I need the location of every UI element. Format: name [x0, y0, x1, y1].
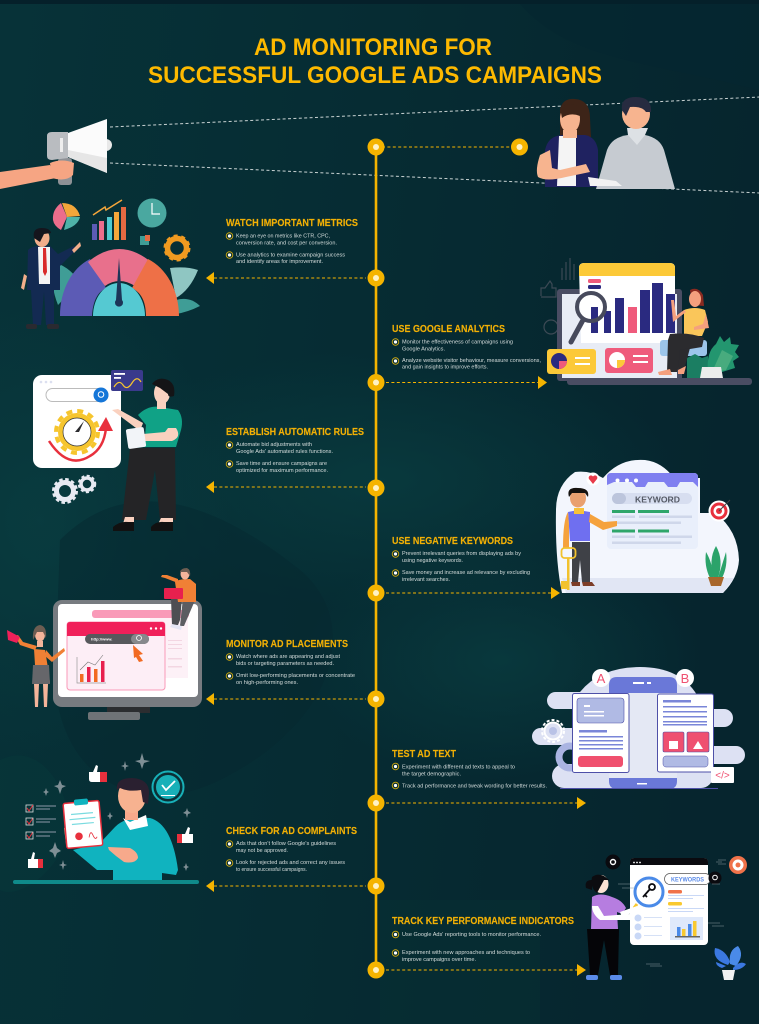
- variant A card: [572, 694, 629, 772]
- bullet points: [226, 233, 345, 265]
- bullet points: [392, 763, 547, 790]
- bullet points: [226, 654, 355, 686]
- panel: track key performance indicators: [392, 916, 574, 963]
- target badge: [729, 856, 747, 874]
- bullet points: [392, 339, 542, 371]
- illustration: automatic rules: [33, 370, 182, 531]
- panel: check for ad complaints: [226, 826, 357, 873]
- timeline nodes: [368, 138, 384, 978]
- bullet points: irrelevant searches.: [402, 577, 450, 583]
- bullet points: [392, 931, 541, 963]
- bullet points: Automate bid adjustments with: [236, 442, 312, 448]
- magnifier: [571, 293, 605, 342]
- ghost content lines: [168, 640, 182, 668]
- heading: TEST AD TEXT: [392, 749, 456, 760]
- badge A: [592, 669, 610, 687]
- businessman: [21, 228, 81, 329]
- icon: megaphone held in hand: [0, 119, 112, 189]
- bullet points: and gain insights to improve efforts.: [402, 365, 488, 371]
- gears: [542, 720, 581, 768]
- title: [148, 34, 602, 89]
- man on monitor with laptop: [161, 568, 196, 630]
- bullet points: Use analytics to examine campaign success: [236, 252, 345, 258]
- heading: WATCH IMPORTANT METRICS: [226, 218, 358, 229]
- panel: watch important metrics: [226, 218, 358, 265]
- bullet points: bids or targeting parameters as needed.: [236, 661, 334, 667]
- arrow: complaints: [206, 880, 366, 892]
- variant B card: [658, 694, 714, 772]
- keywords search pill: KEYWORDS: [671, 878, 704, 884]
- phone: [609, 677, 677, 789]
- man with key: [561, 488, 617, 590]
- illustration: ad placements monitor: [7, 568, 202, 720]
- blue plant: [715, 946, 746, 980]
- sparkles: [43, 753, 191, 871]
- man with clipboard: [64, 778, 178, 880]
- motion marks: [618, 860, 726, 966]
- thumbs up: [28, 765, 193, 868]
- bullet points: using negative keywords.: [402, 558, 463, 564]
- bullet points: [226, 841, 345, 873]
- timeline spine: [375, 147, 377, 970]
- heading: USE NEGATIVE KEYWORDS: [392, 536, 513, 547]
- heading: USE GOOGLE ANALYTICS: [392, 324, 505, 335]
- line and bar chart: [77, 655, 106, 683]
- navy note: [111, 370, 143, 391]
- panel: monitor ad placements: [226, 639, 355, 686]
- bullet points: [226, 442, 333, 474]
- signal lines from megaphone: [110, 97, 759, 193]
- heading: MONITOR AD PLACEMENTS: [226, 639, 348, 650]
- woman with megaphone: [7, 625, 65, 707]
- bullet points: Experiment with different ad texts to appeal to: [402, 765, 515, 771]
- bar chart icon: [92, 200, 126, 240]
- illustration: ad complaints: [13, 753, 199, 884]
- bullet points: optimized for maximum performance.: [236, 468, 328, 474]
- bullet points: improve campaigns over time.: [402, 957, 476, 963]
- title: AD MONITORING FOR: [254, 34, 492, 61]
- clipboard: [63, 797, 103, 848]
- badge B: [676, 669, 694, 687]
- bullet points: Experiment with new approaches and techniques to: [402, 950, 530, 956]
- keywords search pill: [664, 872, 722, 884]
- gear badge: [606, 854, 620, 870]
- bullet points: Monitor the effectiveness of campaigns using: [402, 340, 513, 346]
- arrow: placements: [206, 693, 366, 705]
- title: SUCCESSFUL GOOGLE ADS CAMPAIGNS: [148, 62, 602, 89]
- panel: establish automatic rules: [226, 427, 364, 474]
- bullet points: Keep an eye on metrics like CTR, CPC,: [236, 234, 330, 240]
- bullet points: Google Analytics.: [402, 346, 445, 352]
- badge B: B: [681, 671, 689, 686]
- bullet points: the target demographic.: [402, 772, 461, 778]
- arrow: analytics: [386, 376, 547, 389]
- bullet points: Prevent irrelevant queries from displaying ads by: [402, 551, 521, 557]
- checklist: [26, 805, 56, 839]
- illustration: A/B ad test: [532, 667, 745, 789]
- man with tablet: [112, 379, 182, 531]
- bullet points: Ads that don't follow Google's guidelines: [236, 841, 336, 847]
- speed gear: [56, 411, 98, 453]
- bullet points: [392, 551, 530, 583]
- gears: [54, 476, 95, 502]
- bullet points: Save time and ensure campaigns are: [236, 461, 327, 467]
- bullet points: Track ad performance and tweak wording for better results.: [402, 784, 547, 790]
- bullet points: Save money and increase ad relevance by excluding: [402, 570, 530, 576]
- arrow: rules: [206, 481, 366, 493]
- url label: http://www.: [91, 636, 112, 642]
- heart: [586, 472, 600, 486]
- bullet points: to ensure successful campaigns.: [236, 867, 307, 873]
- key: [561, 548, 576, 590]
- bullet points: Google Ads' automated rules functions.: [236, 449, 333, 455]
- panel: test ad text: [392, 749, 547, 790]
- clock icon: [138, 198, 166, 228]
- key magnifier: [634, 878, 663, 908]
- keyword label: KEYWORD: [635, 494, 680, 504]
- pie chart icon: [53, 203, 80, 230]
- illustration: KPI tracking: [586, 854, 747, 980]
- bullet points: Analyze website visitor behaviour, measure conversions,: [402, 358, 542, 364]
- approval badge: [152, 772, 184, 802]
- bullet points: and identify areas for improvement.: [236, 259, 323, 265]
- bullet points: conversion rate, and cost per conversion.: [236, 240, 337, 246]
- code tag: [711, 767, 734, 783]
- illustration: analytics laptop: [541, 258, 752, 385]
- mini bar chart: [670, 917, 703, 940]
- code tag: </>: [715, 770, 730, 782]
- panel: use google analytics: [392, 324, 542, 371]
- top connector to people: [382, 138, 528, 156]
- bullet points: Watch where ads are appearing and adjust: [236, 654, 341, 660]
- pink pie card: [605, 348, 653, 373]
- arrow: metrics: [206, 272, 366, 284]
- heading: TRACK KEY PERFORMANCE INDICATORS: [392, 916, 574, 927]
- badge A: A: [597, 671, 606, 686]
- potted plant: [706, 546, 726, 586]
- bullet points: may not be approved.: [236, 848, 288, 854]
- heading: ESTABLISH AUTOMATIC RULES: [226, 427, 364, 438]
- icon: two colleagues: [537, 97, 675, 189]
- illustration: metrics gauge: [21, 198, 200, 329]
- bullet points: Omit low-performing placements or concentrate: [236, 673, 355, 679]
- gear icon: [165, 236, 189, 260]
- bullet points: Use Google Ads' reporting tools to monitor performance.: [402, 932, 541, 938]
- arrow: negative keywords: [386, 587, 560, 599]
- arrow: KPIs: [386, 964, 586, 976]
- target: [708, 500, 730, 522]
- plant: [687, 336, 739, 378]
- panel: use negative keywords: [392, 536, 530, 583]
- yellow pie card: [547, 349, 596, 374]
- arrow: ad text: [386, 797, 586, 809]
- bullet points: on high-performing ones.: [236, 680, 298, 686]
- red arrow: [49, 417, 113, 461]
- illustration: negative keywords: [556, 460, 739, 593]
- bullet points: Look for rejected ads and correct any issues: [236, 860, 345, 866]
- heading: CHECK FOR AD COMPLAINTS: [226, 826, 357, 837]
- woman: [586, 875, 639, 980]
- woman with laptop: [658, 289, 709, 375]
